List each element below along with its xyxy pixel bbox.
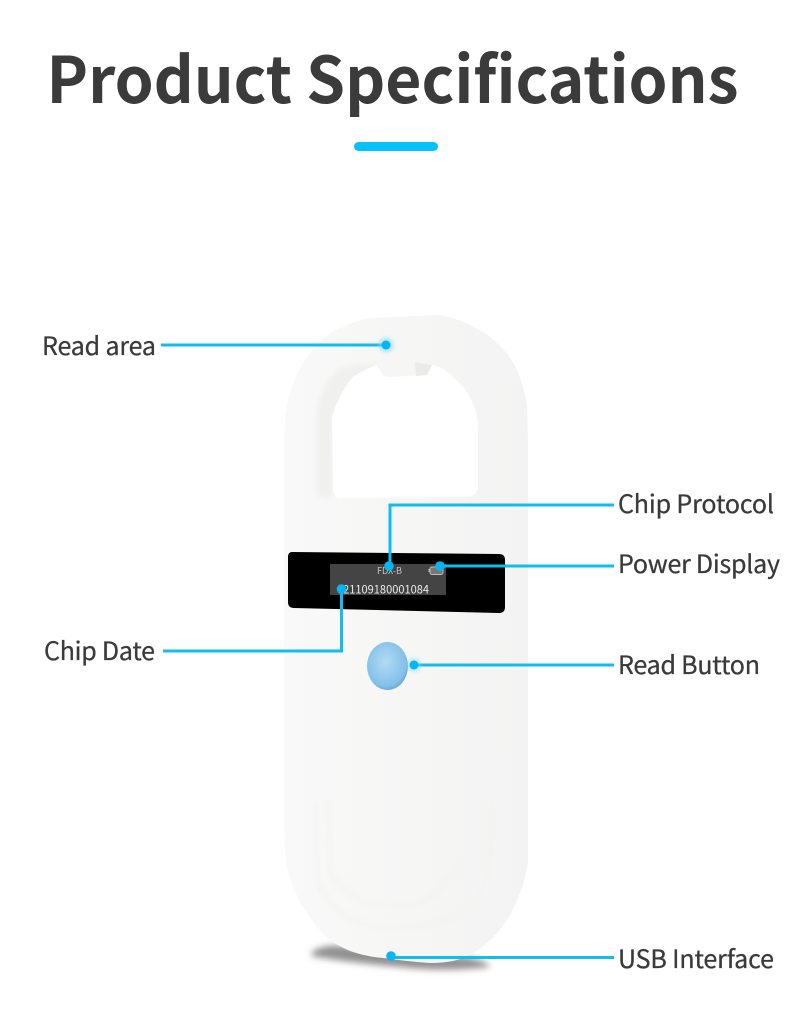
title: Product Specifications <box>46 30 738 122</box>
read area tab shading <box>415 362 432 376</box>
device body <box>284 315 528 963</box>
callout: power display: Power Display <box>618 545 780 581</box>
callout: USB interface: USB Interface <box>618 940 774 976</box>
battery icon <box>428 567 443 574</box>
display panel <box>288 552 505 613</box>
callout: chip protocol: Chip Protocol <box>618 485 774 521</box>
hole opening <box>332 365 478 498</box>
callout: read area: Read area <box>42 327 156 363</box>
chip number readout: 021109180001084 <box>337 580 429 598</box>
callout: read button: Read Button <box>618 646 760 682</box>
product: handheld chip reader <box>284 315 528 970</box>
title accent bar <box>354 142 438 151</box>
callout: chip date: Chip Date <box>44 632 155 668</box>
callout: USB interface <box>386 940 774 976</box>
callout: chip date <box>44 584 346 668</box>
display screen <box>330 564 446 595</box>
protocol readout: FDX-B <box>377 564 402 577</box>
callout: read area <box>42 327 393 363</box>
hole inner wall <box>316 364 378 498</box>
inner lower contour <box>328 800 462 906</box>
read button <box>367 642 408 690</box>
callout: chip protocol <box>384 485 774 571</box>
device shadow <box>312 946 489 970</box>
callout: power display <box>435 545 780 581</box>
lower body contour <box>315 800 492 927</box>
callout: read button <box>408 646 760 682</box>
